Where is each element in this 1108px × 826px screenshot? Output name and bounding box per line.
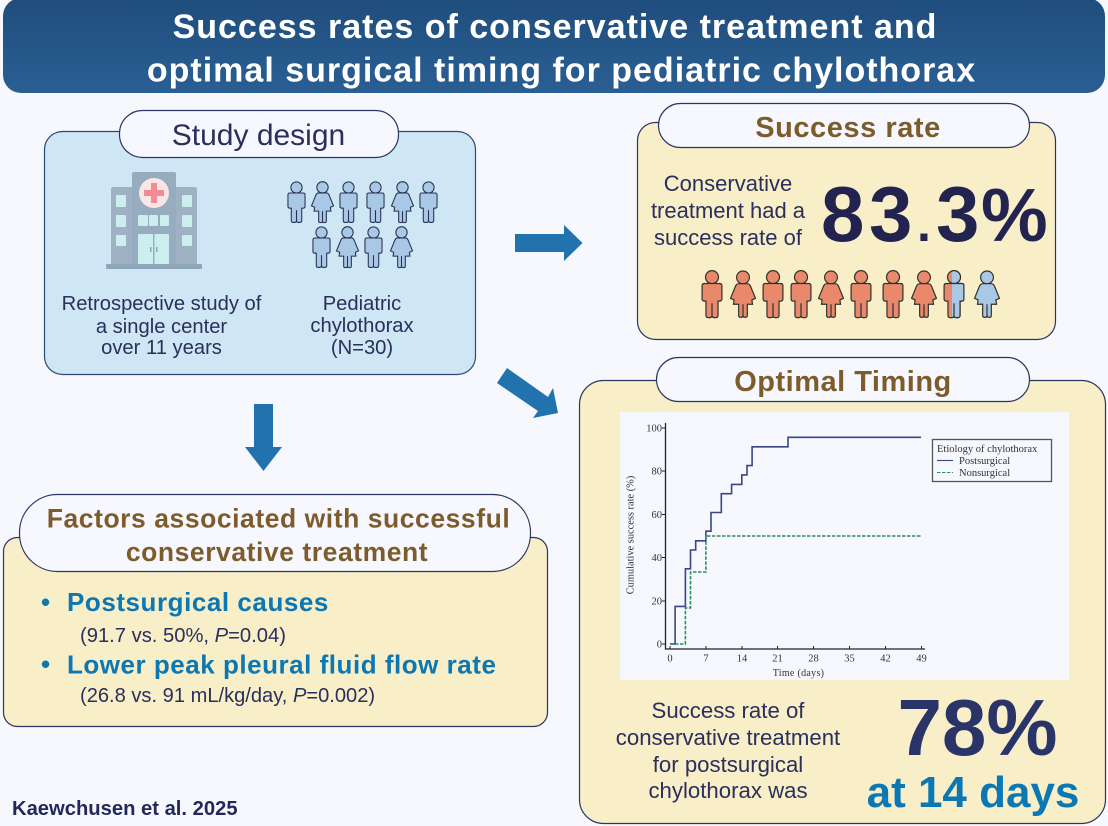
y axis labels: 80: [652, 466, 662, 478]
panel: optimal timing: [580, 358, 1106, 824]
chart axes: [662, 423, 925, 649]
panel: factors: [4, 494, 548, 726]
arrow: to optimal timing: [497, 368, 558, 418]
legend: Nonsurgical: [959, 468, 1010, 479]
stat: at 14 days: at 14 days: [867, 768, 1079, 817]
panel: study design: [44, 110, 476, 374]
heading: factors: Factors associated with successful: [47, 504, 510, 534]
legend: [932, 440, 1052, 482]
stat: 83.3%: 3: [869, 170, 912, 258]
icon: pictogram 10 people: [702, 271, 999, 318]
text: pediatric chylothorax: (N=30): [331, 337, 393, 359]
y axis labels: 40: [652, 553, 662, 564]
chart: cumulative success rate: [620, 412, 1069, 680]
heading: success rate: [658, 104, 1030, 148]
factor: postsurgical causes: (91.7 vs. 50%, P=0.04): [80, 625, 286, 647]
legend: Postsurgical: [959, 456, 1010, 467]
line: nonsurgical: [670, 536, 921, 644]
stat: 83.3%: %: [981, 173, 1048, 257]
text: conservative treatment: success rate of: [654, 225, 803, 250]
x axis labels: 49: [916, 654, 927, 664]
x axis labels: 42: [880, 654, 891, 664]
heading: factors: [20, 494, 530, 572]
text: pediatric chylothorax: chylothorax: [310, 315, 414, 337]
text: success rate of conservative treatment: conservative treatment: [616, 725, 840, 750]
icon: patients group: [288, 182, 437, 268]
heading: optimal timing: [656, 358, 1030, 402]
stat: 83.3%: 8: [821, 170, 864, 258]
text: pediatric chylothorax: Pediatric: [323, 293, 401, 315]
x axis labels: 35: [844, 654, 855, 664]
text: retrospective study: over 11 years: [101, 337, 222, 359]
text: success rate of conservative treatment: [616, 698, 840, 803]
stat: 83.3%: 3: [936, 170, 979, 258]
heading: study design: Study design: [172, 119, 345, 152]
factor: postsurgical causes: Postsurgical causes: [67, 587, 329, 617]
factor: lower peak flow rate: •: [41, 649, 50, 679]
title banner: optimal surgical timing for pediatric chylothorax: [147, 52, 976, 90]
text: conservative treatment: [651, 171, 806, 250]
y axis labels: 100: [646, 424, 662, 434]
heading: success rate: Success rate: [755, 112, 941, 144]
y axis labels: 60: [652, 510, 662, 521]
text: pediatric chylothorax: [310, 293, 414, 359]
panel: success rate: [638, 104, 1056, 340]
factor: lower peak flow rate: [41, 649, 496, 707]
arrow: to success rate: [515, 225, 582, 261]
x axis labels: 7: [703, 654, 709, 664]
heading: optimal timing: Optimal Timing: [734, 366, 952, 398]
text: conservative treatment: treatment had a: [651, 198, 806, 223]
line: postsurgical: [670, 437, 921, 644]
factor: postsurgical causes: •: [41, 587, 50, 617]
text: conservative treatment: Conservative: [664, 171, 792, 196]
text: retrospective study: Retrospective study of: [62, 293, 262, 315]
title banner: [3, 0, 1105, 93]
y axis labels: 20: [652, 596, 662, 608]
y axis labels: 0: [657, 640, 662, 650]
x axis labels: 0: [667, 654, 673, 664]
factor: postsurgical causes: [41, 587, 329, 647]
y axis title: Cumulative success rate (%): [626, 476, 636, 594]
arrow: to factors: [245, 404, 282, 471]
x axis title: Time (days): [773, 668, 824, 679]
text: success rate of conservative treatment: for postsurgical: [653, 752, 803, 777]
x axis labels: 14: [737, 654, 748, 664]
legend: Etiology of chylothorax: [937, 444, 1038, 455]
icon: hospital: [106, 172, 202, 269]
x axis labels: 28: [808, 654, 819, 664]
text: retrospective study: a single center: [96, 316, 227, 338]
x axis labels: 21: [772, 654, 783, 664]
text: success rate of conservative treatment: chylothorax was: [648, 778, 808, 803]
x axis labels: [667, 654, 927, 664]
heading: factors: conservative treatment: [126, 537, 428, 567]
text: success rate of conservative treatment: Success rate of: [652, 698, 805, 723]
text: retrospective study: [62, 293, 262, 359]
title banner: Success rates of conservative treatment and: [173, 8, 937, 46]
heading: study design: [120, 110, 398, 158]
factor: lower peak flow rate: Lower peak pleural fluid flow rate: [67, 650, 496, 680]
factor: lower peak flow rate: (26.8 vs. 91 mL/kg/day, P=0.002): [80, 685, 375, 707]
citation: Kaewchusen et al. 2025: [12, 798, 238, 820]
stat: 78%: 78%: [897, 683, 1058, 772]
y axis labels: [646, 424, 662, 650]
stat: 83.3%: .: [917, 196, 931, 252]
